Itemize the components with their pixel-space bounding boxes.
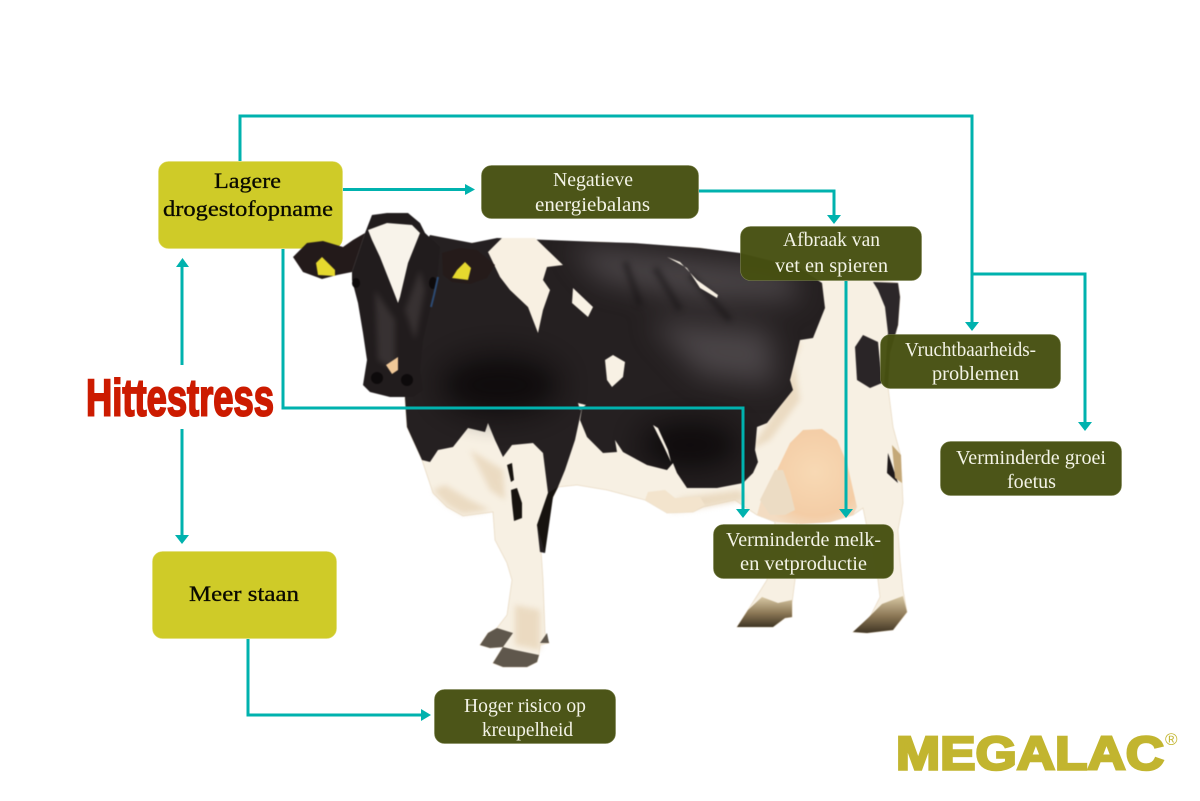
photo: Holstein cow — [293, 213, 907, 667]
arrow: branch to Verminderde groei foetus — [972, 274, 1092, 431]
logo: Megalac: MEGALAC — [896, 728, 1164, 780]
box: Verminderde melk- en vetproductie — [714, 524, 894, 578]
nose — [386, 357, 398, 374]
left ear tag — [316, 257, 335, 276]
tail — [887, 453, 898, 483]
hooves — [480, 628, 549, 667]
arrow: Hittestress down — [175, 429, 189, 544]
box: Hoger risico op kreupelheid: Hoger risico op — [464, 695, 586, 717]
box: Verminderde groei foetus: Verminderde groei — [956, 447, 1106, 469]
udder seam — [760, 470, 795, 515]
box: Negatieve energiebalans: energiebalans — [535, 194, 650, 216]
box: Verminderde groei foetus: foetus — [1007, 471, 1056, 493]
white hide shading — [433, 330, 800, 650]
small white spots — [572, 257, 718, 462]
arrow: Negatieve energiebalans to Afbraak — [699, 191, 841, 224]
arrow: Lagere drogestofopname to melkproductie — [283, 249, 750, 518]
blaze — [368, 223, 420, 303]
title: Hittestress: Hittestress — [86, 370, 274, 428]
box: Lagere drogestofopname: Lagere — [214, 168, 281, 193]
box: Meer staan: Meer staan — [189, 581, 299, 606]
arrow: Afbraak to melkproductie — [839, 281, 853, 518]
box: Negatieve energiebalans — [482, 166, 698, 218]
halter strap — [431, 277, 438, 307]
box: Afbraak van vet en spieren: vet en spieren — [775, 255, 888, 277]
head sheen — [375, 270, 425, 370]
arrow: Lagere drogestofopname to Vruchtbaarheidsproblemen — [240, 116, 979, 331]
box: Lagere drogestofopname — [158, 162, 342, 248]
logo: Megalac: ® — [1165, 730, 1178, 749]
right ear tag — [452, 262, 471, 280]
right ear — [442, 248, 495, 284]
main black coat — [405, 235, 825, 553]
shoulder white patch — [488, 238, 563, 333]
box: Afbraak van vet en spieren — [740, 226, 922, 280]
box: Verminderde melk- en vetproductie: Verminderde melk- — [726, 529, 881, 551]
rear black spot — [855, 335, 882, 388]
box: Vruchtbaarheidsproblemen: Vruchtbaarheids- — [905, 339, 1036, 361]
box: Lagere drogestofopname: drogestofopname — [163, 196, 333, 221]
udder teats — [645, 490, 705, 513]
box: Negatieve energiebalans: Negatieve — [553, 169, 633, 191]
arrow: Hittestress up — [176, 258, 189, 365]
udder — [757, 429, 857, 524]
left ear — [293, 233, 365, 279]
muzzle and eyes — [352, 277, 437, 386]
coat shading — [440, 245, 800, 470]
box: Hoger risico op kreupelheid — [434, 690, 616, 744]
box: Afbraak van vet en spieren: Afbraak van — [783, 229, 880, 251]
box: Verminderde groei foetus — [940, 442, 1122, 496]
box: Meer staan — [152, 552, 336, 638]
box: Verminderde melk- en vetproductie: en vetproductie — [740, 553, 867, 575]
arrow: to Negatieve energiebalans — [343, 184, 475, 195]
box: Hoger risico op kreupelheid: kreupelheid — [482, 719, 573, 741]
cow body silhouette — [405, 242, 907, 667]
box: Vruchtbaarheidsproblemen — [880, 334, 1060, 388]
box: Vruchtbaarheidsproblemen: problemen — [932, 363, 1019, 385]
front leg black marks — [507, 463, 558, 553]
arrow: Meer staan to kreupelheid — [248, 639, 431, 721]
rear black band — [873, 282, 900, 387]
neck and head — [352, 213, 440, 397]
